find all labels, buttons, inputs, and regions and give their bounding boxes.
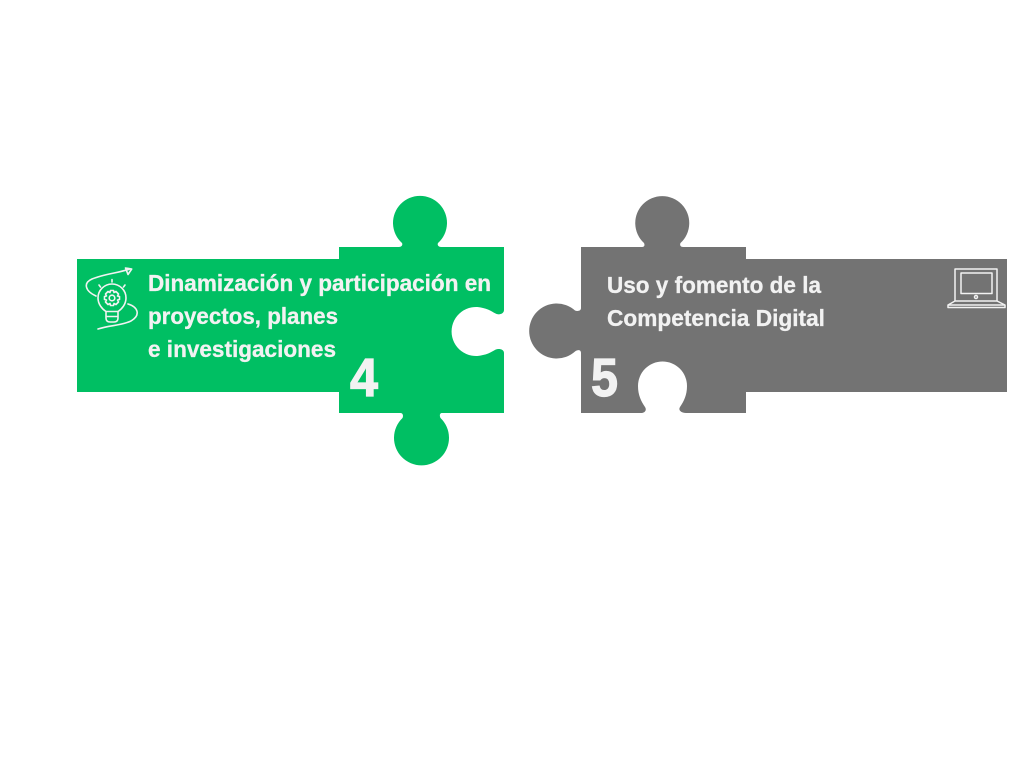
heading: puzzle 5 text: Competencia Digital [607,305,825,331]
puzzle shape: grey [529,196,1007,413]
heading: puzzle 4 text [148,270,491,362]
heading: puzzle 4 text: proyectos, planes [148,303,338,329]
heading: puzzle 4 text: Dinamización y participación en [148,270,491,296]
heading: puzzle 4 text: e investigaciones [148,336,336,362]
heading: puzzle 5 text: Uso y fomento de la [607,272,821,298]
icon: light bulb with gear and arrow [86,268,137,329]
number 5: 5 [591,348,618,408]
icon: laptop [948,269,1005,308]
panel: green puzzle piece 4 [77,196,504,465]
panel: grey puzzle piece 5 [529,196,1007,413]
heading: puzzle 5 text [607,272,825,331]
number 4: 4 [350,348,378,408]
puzzle shape: green [77,196,504,465]
